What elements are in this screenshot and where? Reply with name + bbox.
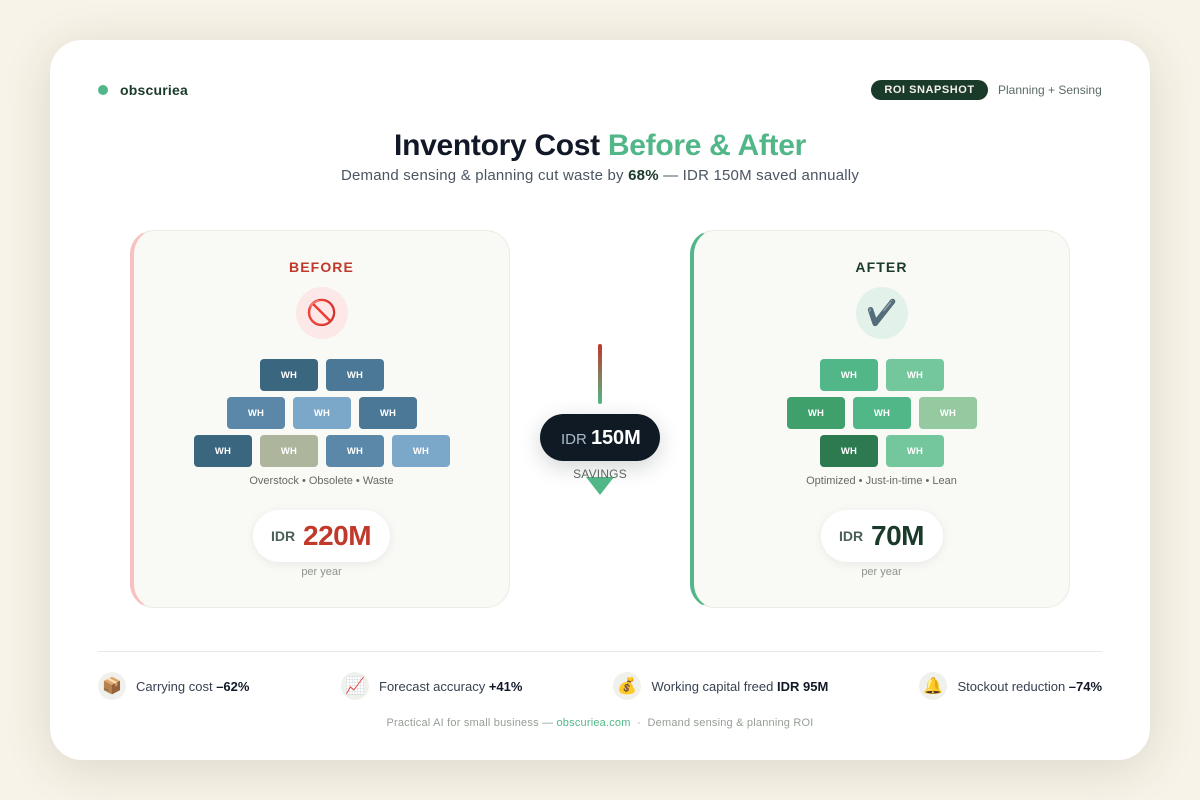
- warehouse grid: before: WH: [314, 408, 330, 419]
- after caption: Optimized • Just-in-time • Lean: [806, 475, 957, 487]
- icon: package: [98, 672, 126, 700]
- arrow down: [586, 477, 614, 495]
- footer: Practical AI for small business — obscuriea.com · Demand sensing & planning ROI: [386, 717, 814, 729]
- panel: after: [690, 230, 1070, 608]
- warehouse grid: after: WH: [907, 370, 923, 381]
- warehouse grid: after: WH: [841, 446, 857, 457]
- cost pill: before: [253, 510, 390, 562]
- panel: before: [130, 230, 510, 608]
- savings pill: IDR: [561, 431, 587, 448]
- warehouse grid: before: WH: [281, 446, 297, 457]
- savings pill: [540, 414, 660, 461]
- label: Working capital freed IDR 95M: [652, 679, 828, 694]
- header tag: Planning + Sensing: [998, 83, 1102, 97]
- cost pill: before: IDR: [271, 528, 295, 544]
- label: Forecast accuracy +41%: [379, 679, 522, 694]
- metric: carrying cost: [98, 672, 250, 700]
- badge: ROI snapshot: [871, 80, 988, 100]
- cost pill: after: IDR: [839, 528, 863, 544]
- icon: prohibited: 🚫: [306, 299, 338, 327]
- warehouse grid: before: WH: [347, 446, 363, 457]
- warehouse grid: after: [787, 359, 977, 467]
- title: Inventory Cost Before & After: [394, 129, 806, 162]
- icon: money bag: 💰: [617, 678, 637, 695]
- icon: check mark: [856, 287, 908, 339]
- icon: prohibited: [296, 287, 348, 339]
- before caption: Overstock • Obsolete • Waste: [249, 475, 394, 487]
- warehouse grid: after: WH: [940, 408, 956, 419]
- warehouse grid: before: WH: [248, 408, 264, 419]
- after per year: per year: [861, 566, 902, 578]
- label: Stockout reduction –74%: [958, 679, 1102, 694]
- warehouse grid: before: WH: [215, 446, 231, 457]
- warehouse grid: after: WH: [841, 370, 857, 381]
- warehouse grid: after: WH: [808, 408, 824, 419]
- metric: forecast accuracy: [341, 672, 522, 700]
- brand name: obscuriea: [120, 82, 188, 98]
- metric: working capital: [613, 672, 828, 700]
- before heading: BEFORE: [289, 259, 354, 275]
- warehouse grid: before: WH: [281, 370, 297, 381]
- logo dot: [98, 85, 108, 95]
- icon: money bag: [613, 672, 641, 700]
- warehouse grid: before: WH: [347, 370, 363, 381]
- cost pill: after: [821, 510, 943, 562]
- warehouse grid: after: WH: [907, 446, 923, 457]
- metric: stockout reduction: [919, 672, 1102, 700]
- icon: package: 📦: [102, 678, 122, 695]
- icon: bell: 🔔: [923, 678, 943, 695]
- savings label: SAVINGS: [573, 467, 627, 481]
- warehouse grid: before: WH: [413, 446, 429, 457]
- cost pill: before: 220M: [303, 520, 371, 551]
- subtitle: Demand sensing & planning cut waste by 68% — IDR 150M saved annually: [341, 166, 859, 184]
- cost pill: after: 70M: [871, 520, 924, 551]
- warehouse grid: after: WH: [874, 408, 890, 419]
- label: Carrying cost –62%: [136, 679, 249, 694]
- connector bar: [598, 344, 602, 404]
- savings pill: 150M: [591, 427, 641, 449]
- before per year: per year: [301, 566, 342, 578]
- warehouse grid: before: WH: [380, 408, 396, 419]
- icon: chart: [341, 672, 369, 700]
- badge: ROI snapshot: ROI SNAPSHOT: [884, 84, 975, 96]
- icon: check mark: ✔️: [866, 299, 898, 327]
- icon: bell: [919, 672, 947, 700]
- warehouse grid: before: [194, 359, 450, 467]
- after heading: AFTER: [855, 259, 908, 275]
- icon: chart: 📈: [345, 678, 365, 695]
